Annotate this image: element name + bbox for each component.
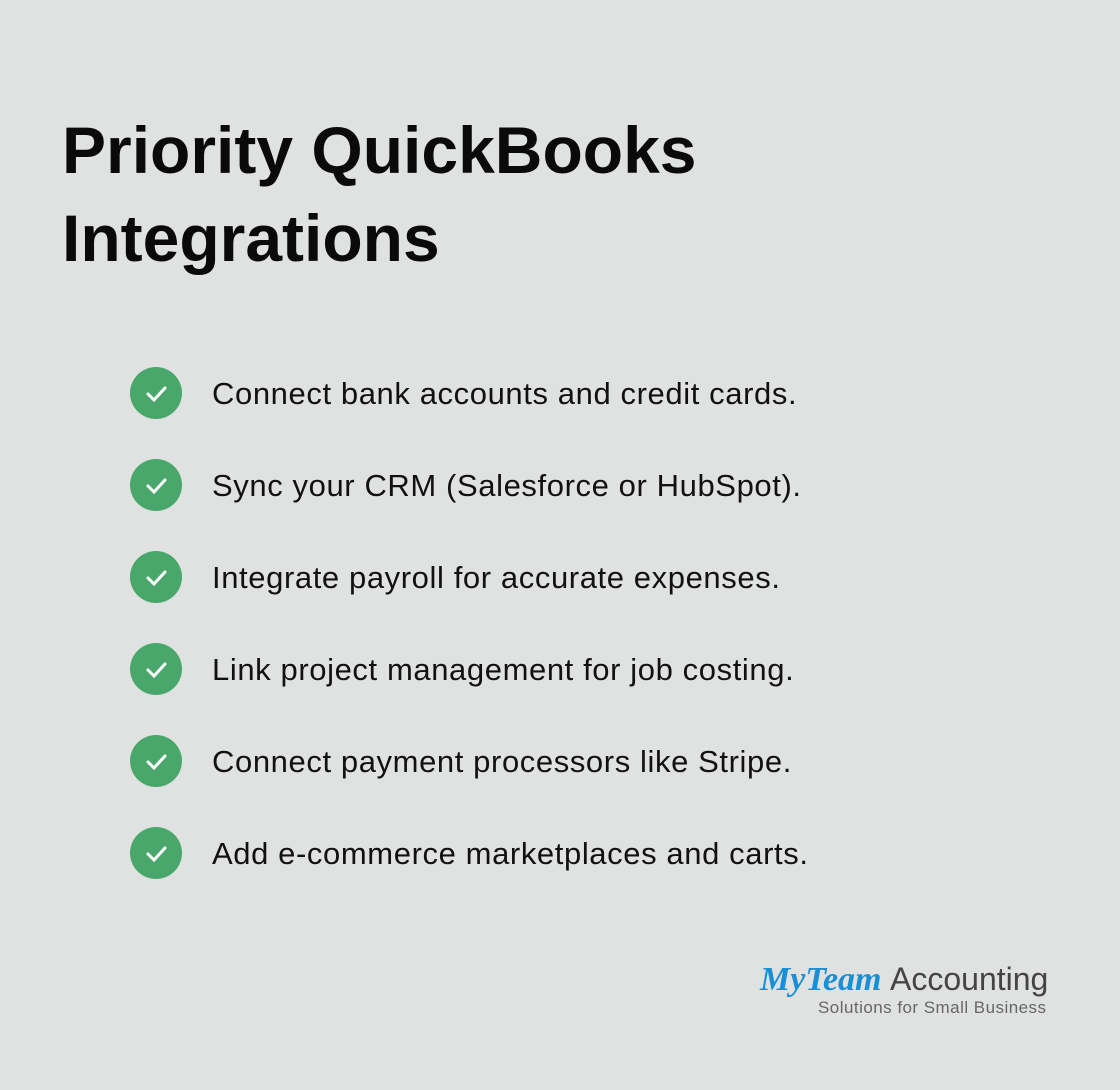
logo — [759, 961, 1048, 1017]
item 3 — [130, 551, 781, 603]
item 5 — [130, 735, 792, 787]
logo: MyTeam — [759, 961, 882, 998]
item 2: Sync your CRM (Salesforce or HubSpot). — [212, 468, 802, 503]
title — [62, 113, 697, 275]
logo: Solutions for Small Business — [818, 998, 1046, 1017]
item 6: Add e-commerce marketplaces and carts. — [212, 836, 809, 871]
title: Priority QuickBooks — [62, 113, 697, 187]
title: Integrations — [62, 201, 440, 275]
item 1: Connect bank accounts and credit cards. — [212, 376, 797, 411]
logo: Accounting — [890, 961, 1048, 997]
item 4 — [130, 643, 794, 695]
item 1 — [130, 367, 797, 419]
item 6 — [130, 827, 809, 879]
item 5: Connect payment processors like Stripe. — [212, 744, 792, 779]
item 2 — [130, 459, 802, 511]
item 3: Integrate payroll for accurate expenses. — [212, 560, 781, 595]
item 4: Link project management for job costing. — [212, 652, 794, 687]
